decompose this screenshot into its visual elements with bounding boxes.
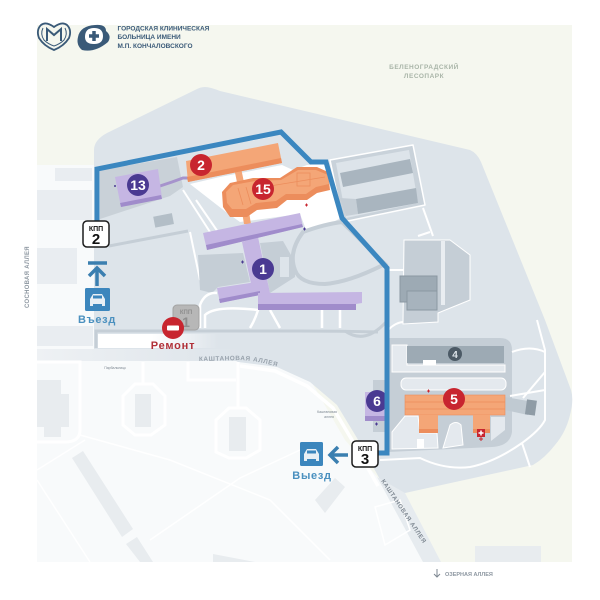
car icon exit 3 — [300, 442, 323, 466]
Kashtanovaya alley curved label: КАШТАНОВАЯ АЛЛЕЯ — [199, 356, 278, 366]
Kashtanovaya alley diagonal label: КАШТАНОВАЯ АЛЛЕЯ — [379, 479, 427, 545]
small street label: Парбальницк — [104, 366, 126, 370]
pale white bits above building 2 — [212, 136, 270, 146]
marker 6: 6 — [373, 393, 381, 409]
logo text: М.П. КОНЧАЛОВСКОГО — [118, 43, 192, 50]
pale strip in yard — [280, 257, 289, 277]
label exit 2: Въезд — [78, 314, 116, 326]
entry arrow — [88, 263, 107, 286]
building 1 — [203, 213, 362, 310]
white kerb along alley — [240, 366, 378, 486]
building 4 and 5 road loop — [388, 338, 512, 452]
main horizontal road — [96, 331, 378, 348]
east parking with building — [400, 240, 470, 324]
white paths by parking — [183, 190, 218, 280]
logo text — [118, 26, 210, 50]
KPP 3 sign: КПП — [358, 446, 372, 453]
logo text: БОЛЬНИЦА ИМЕНИ — [118, 34, 181, 41]
marker 15: 15 — [255, 181, 271, 197]
white road strip — [98, 334, 218, 348]
parking stub east — [505, 397, 528, 415]
Ozernaya label: ОЗЕРНАЯ АЛЛЕЯ — [445, 572, 493, 578]
Kashtanovaya alley south band — [377, 477, 441, 562]
KPP 1 sign: КПП — [180, 310, 192, 316]
car icon exit 2 — [85, 288, 110, 311]
KPP 2 sign: 2 — [92, 231, 100, 248]
marker 2: 2 — [197, 157, 205, 173]
building 6 — [365, 380, 388, 432]
no entry icon — [162, 317, 184, 339]
logo text: ГОРОДСКАЯ КЛИНИЧЕСКАЯ — [118, 26, 210, 32]
map background — [37, 25, 572, 562]
road from KPP 2 — [109, 231, 188, 246]
city area lower left — [37, 165, 423, 562]
south east paths — [380, 320, 545, 468]
KPP 2 sign — [83, 221, 109, 248]
KPP 1 sign — [173, 305, 199, 330]
marker 13: 13 — [130, 177, 146, 193]
white courtyard around buildings — [190, 163, 341, 232]
road bend to route — [345, 322, 386, 336]
west side blocks — [37, 168, 93, 346]
forest park label: БЕЛЕНОГРАДСКИЙ — [389, 62, 459, 71]
north east building block — [330, 145, 425, 222]
marker 5: 5 — [450, 391, 458, 407]
passage from 2 to 15 — [234, 168, 245, 187]
building 5 — [405, 388, 505, 433]
building 15 — [222, 167, 330, 217]
marker 1: 1 — [259, 261, 267, 277]
small place label second line: аллея — [324, 415, 334, 419]
entrance markers — [114, 185, 430, 426]
parking below building 1 — [198, 253, 250, 293]
blue route — [97, 132, 387, 453]
pale cap east of building 2 — [282, 150, 291, 163]
Sosnovaya alley label: СОСНОВАЯ АЛЛЕЯ — [25, 246, 31, 308]
east paths — [388, 208, 433, 330]
label repair: Ремонт — [151, 340, 195, 352]
oval access road — [293, 222, 385, 284]
marker 4: 4 — [452, 350, 458, 361]
marker 1 — [252, 258, 274, 280]
lower left thin paths — [37, 435, 410, 562]
Ozernaya arrow — [434, 569, 440, 577]
forest park label second line: ЛЕСОПАРК — [404, 73, 444, 80]
logo: heart shield — [38, 23, 70, 50]
KPP 1 sign: 1 — [182, 314, 190, 330]
exit arrow — [330, 447, 348, 463]
logo: medical cross — [78, 25, 110, 51]
KPP 3 sign — [352, 441, 378, 468]
building 13 — [115, 169, 162, 207]
parking 13 — [100, 157, 183, 219]
covered passage 13 to 2 — [160, 178, 188, 186]
building 4 — [407, 346, 504, 365]
small place label: Каштановая — [317, 410, 337, 414]
KPP 2 sign: КПП — [89, 226, 103, 233]
label exit 3: Выезд — [292, 470, 332, 482]
passage from 15 to 1 — [242, 212, 251, 224]
medical cross marker — [477, 429, 485, 441]
small grey building — [153, 213, 174, 228]
hospital grounds — [94, 87, 572, 493]
building 2 — [186, 143, 282, 182]
lower left white paths — [37, 362, 260, 458]
car park block — [525, 399, 537, 416]
lower left buildings — [37, 380, 541, 562]
grey yard east of stem — [260, 241, 295, 293]
KPP 3 sign: 3 — [361, 451, 369, 468]
west alley band — [37, 349, 240, 361]
white drives under building 1 — [200, 293, 340, 328]
